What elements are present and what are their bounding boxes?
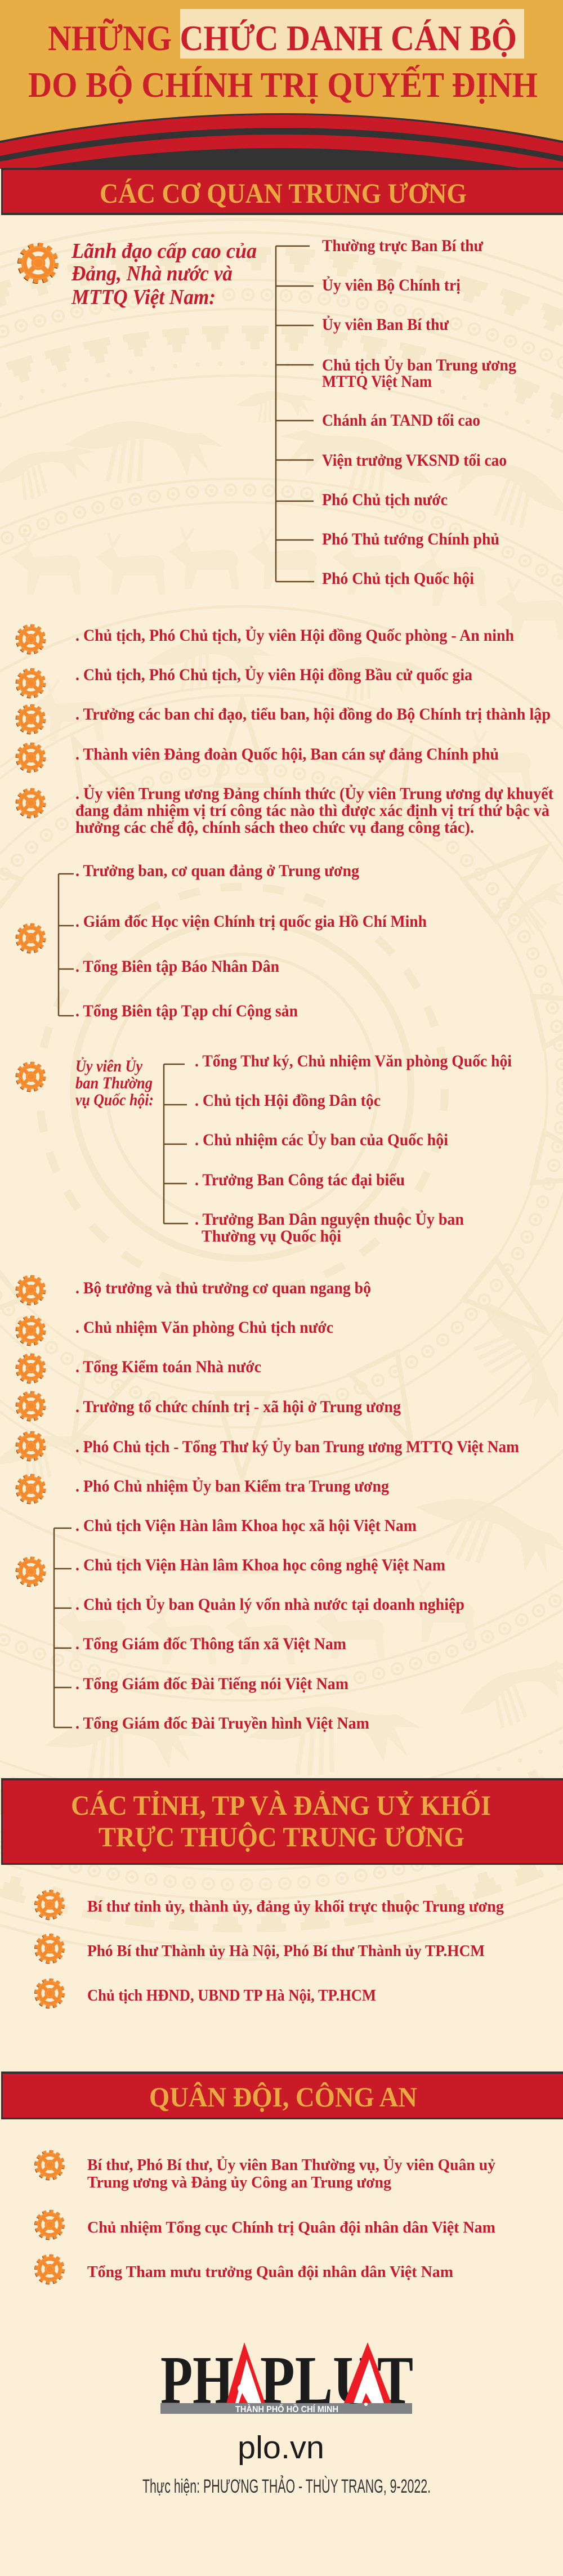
list: . Trưởng ban, cơ quan đảng ở Trung ương bbox=[75, 861, 359, 880]
header panel with title bbox=[0, 0, 563, 169]
list: . Tổng Thư ký, Chủ nhiệm Văn phòng Quốc hội bbox=[195, 1052, 512, 1070]
list: . Chủ tịch Hội đồng Dân tộc bbox=[195, 1091, 381, 1110]
list: . Trưởng Ban Dân nguyện thuộc Ủy ban bbox=[195, 1210, 464, 1229]
icon: gear bbox=[17, 1558, 44, 1586]
logo: pháp luật bbox=[160, 2342, 413, 2418]
panel: party heads tree bbox=[17, 861, 427, 1020]
list: . Chủ nhiệm các Ủy ban của Quốc hội bbox=[195, 1131, 448, 1149]
item: Tổng Tham mưu trưởng Quân đội nhân dân Việt Nam bbox=[87, 2264, 453, 2281]
panel: central items list B bbox=[17, 1276, 519, 1503]
icon: gear bbox=[17, 706, 44, 733]
icon: gear bbox=[17, 744, 44, 771]
subheading: ban Thường bbox=[75, 1074, 153, 1092]
icon: gear bbox=[17, 669, 44, 697]
item: Phó Bí thư Thành ủy Hà Nội, Phó Bí thư Thành ủy TP.HCM bbox=[87, 1943, 485, 1960]
section header: các cơ quan trung ương: CÁC CƠ QUAN TRUNG ƯƠNG bbox=[100, 177, 467, 209]
logo black letters: PH bbox=[160, 2342, 234, 2418]
panel: military list bbox=[36, 2151, 495, 2283]
list: . Tổng Giám đốc Đài Tiếng nói Việt Nam bbox=[75, 1675, 348, 1693]
item: . Thành viên Đảng đoàn Quốc hội, Ban cán sự đảng Chính phủ bbox=[75, 745, 499, 764]
icon: gear bbox=[17, 789, 44, 817]
section header: các tỉnh, tp: TRỰC THUỘC TRUNG ƯƠNG bbox=[99, 1821, 464, 1852]
subheading: lãnh đạo cấp cao: MTTQ Việt Nam: bbox=[71, 285, 216, 309]
logo grey bar bbox=[160, 2403, 412, 2414]
list of leadership titles bbox=[322, 236, 516, 588]
tree connector bbox=[54, 1528, 72, 1727]
panel: central items list A bbox=[17, 626, 553, 837]
item: . Bộ trưởng và thủ trưởng cơ quan ngang bộ bbox=[75, 1279, 371, 1297]
icon: gear bbox=[36, 2151, 64, 2179]
logo black letters: PLU bbox=[260, 2342, 374, 2418]
list of leadership titles: Ủy viên Bộ Chính trị bbox=[322, 276, 461, 294]
panel: academies and media tree bbox=[17, 1516, 464, 1733]
subheading bbox=[75, 1057, 154, 1109]
section header: quân đội, công an: QUÂN ĐỘI, CÔNG AN bbox=[149, 2081, 417, 2113]
icon: gear bbox=[17, 1432, 44, 1460]
logo black letters: T bbox=[377, 2342, 413, 2418]
list: . Chủ tịch Viện Hàn lâm Khoa học xã hội Việt Nam bbox=[75, 1516, 417, 1535]
list bbox=[195, 1052, 512, 1245]
list: . Tổng Giám đốc Thông tấn xã Việt Nam bbox=[75, 1635, 346, 1653]
icon: gear bbox=[17, 1317, 44, 1345]
icon: gear bbox=[17, 1392, 44, 1420]
icon: gear bbox=[36, 2256, 64, 2283]
icon: gear bbox=[17, 1355, 44, 1382]
item: . Chủ tịch, Phó Chủ tịch, Ủy viên Hội đồng Quốc phòng - An ninh bbox=[75, 626, 514, 645]
item: ủy viên trung ương: hưởng các chế độ, chính sách theo chức vụ đang công tác). bbox=[75, 818, 474, 837]
title bbox=[28, 18, 538, 105]
icon: gear bbox=[19, 244, 56, 282]
item: . Chủ nhiệm Văn phòng Chủ tịch nước bbox=[75, 1318, 333, 1337]
icon: gear bbox=[17, 925, 44, 952]
item: . Tổng Kiểm toán Nhà nước bbox=[75, 1358, 261, 1376]
list bbox=[75, 861, 427, 1020]
list: . Chủ tịch Viện Hàn lâm Khoa học công nghệ Việt Nam bbox=[75, 1556, 445, 1574]
list: . Chủ tịch Ủy ban Quản lý vốn nhà nước tại doanh nghiệp bbox=[75, 1595, 464, 1614]
list of leadership titles: MTTQ Việt Nam bbox=[322, 372, 432, 391]
item: Trung ương và Đảng ủy Công an Trung ương bbox=[87, 2174, 391, 2191]
item: Bí thư, Phó Bí thư, Ủy viên Ban Thường vụ, Ủy viên Quân uỷ bbox=[87, 2157, 495, 2174]
list of leadership titles: Phó Chủ tịch Quốc hội bbox=[322, 569, 474, 588]
item: . Trưởng tổ chức chính trị - xã hội ở Trung ương bbox=[75, 1398, 401, 1416]
icon: gear bbox=[36, 1891, 64, 1918]
subheading: lãnh đạo cấp cao: Đảng, Nhà nước và bbox=[71, 262, 233, 285]
item: . Phó Chủ tịch - Tổng Thư ký Ủy ban Trung ương MTTQ Việt Nam bbox=[75, 1437, 519, 1456]
title highlight box bbox=[180, 9, 524, 59]
list of leadership titles: Viện trưởng VKSND tối cao bbox=[322, 451, 507, 470]
logo red A marks bbox=[226, 2342, 391, 2406]
item: Chủ nhiệm Tổng cục Chính trị Quân đội nhân dân Việt Nam bbox=[87, 2219, 495, 2236]
subheading: Ủy viên Ủy bbox=[75, 1057, 143, 1075]
website: plo.vn bbox=[238, 2430, 324, 2466]
icon: gear bbox=[17, 1063, 44, 1091]
icon: gear bbox=[17, 1475, 44, 1503]
list: . Tổng Biên tập Tạp chí Cộng sản bbox=[75, 1002, 298, 1020]
section header: các tỉnh, tp: CÁC TỈNH, TP VÀ ĐẢNG UỶ KHỐI bbox=[71, 1789, 491, 1821]
section header: quân đội, công an bbox=[1, 2071, 563, 2119]
item: Chủ tịch HĐND, UBND TP Hà Nội, TP.HCM bbox=[87, 1987, 376, 2004]
subheading: lãnh đạo cấp cao bbox=[71, 239, 257, 309]
panel: ủy viên ủy ban thường vụ quốc hội bbox=[17, 1052, 512, 1245]
icon: gear bbox=[36, 2211, 64, 2239]
section header: các cơ quan trung ương bbox=[1, 168, 563, 215]
tree connector bbox=[59, 874, 74, 1016]
list: . Giám đốc Học viện Chính trị quốc gia Hồ Chí Minh bbox=[75, 912, 427, 931]
section header: các tỉnh, tp bbox=[1, 1778, 563, 1865]
list of leadership titles: Phó Thủ tướng Chính phủ bbox=[322, 530, 499, 548]
list: . Tổng Giám đốc Đài Truyền hình Việt Nam bbox=[75, 1714, 369, 1733]
tree connector bbox=[164, 1064, 188, 1224]
list of leadership titles: Phó Chủ tịch nước bbox=[322, 490, 448, 509]
background drum pattern bbox=[0, 220, 563, 1959]
list bbox=[75, 1516, 464, 1733]
logo black letters bbox=[160, 2342, 413, 2418]
list of leadership titles: Thường trực Ban Bí thư bbox=[322, 236, 484, 255]
item: . Chủ tịch, Phó Chủ tịch, Ủy viên Hội đồng Bầu cử quốc gia bbox=[75, 666, 472, 684]
list of leadership titles: Ủy viên Ban Bí thư bbox=[322, 315, 449, 334]
item bbox=[87, 2157, 495, 2191]
panel: lãnh đạo cấp cao bbox=[19, 236, 516, 588]
item: Bí thư tỉnh ủy, thành ủy, đảng ủy khối trực thuộc Trung ương bbox=[87, 1898, 504, 1916]
subheading: vụ Quốc hội: bbox=[75, 1091, 154, 1109]
logo subtitle: THÀNH PHỐ HỒ CHÍ MINH bbox=[235, 2403, 338, 2414]
list of leadership titles: Chánh án TAND tối cao bbox=[322, 411, 480, 430]
icon: gear bbox=[36, 1980, 64, 2007]
icon: gear bbox=[36, 1935, 64, 1962]
item: . Phó Chủ nhiệm Ủy ban Kiểm tra Trung ương bbox=[75, 1477, 389, 1495]
list: . Tổng Biên tập Báo Nhân Dân bbox=[75, 957, 279, 976]
list of leadership titles: Chủ tịch Ủy ban Trung ương bbox=[322, 356, 516, 374]
icon: gear bbox=[17, 1276, 44, 1304]
item: ủy viên trung ương bbox=[75, 784, 553, 837]
title: NHỮNG CHỨC DANH CÁN BỘ bbox=[48, 18, 517, 58]
subheading: lãnh đạo cấp cao: Lãnh đạo cấp cao của bbox=[71, 239, 257, 263]
panel: provinces list bbox=[36, 1891, 504, 2007]
tree connector bbox=[276, 246, 314, 582]
list: Thường vụ Quốc hội bbox=[202, 1227, 341, 1245]
icon: gear bbox=[17, 626, 44, 653]
list: . Trưởng Ban Công tác đại biểu bbox=[195, 1171, 405, 1189]
drum arcs decoration bbox=[0, 113, 563, 169]
